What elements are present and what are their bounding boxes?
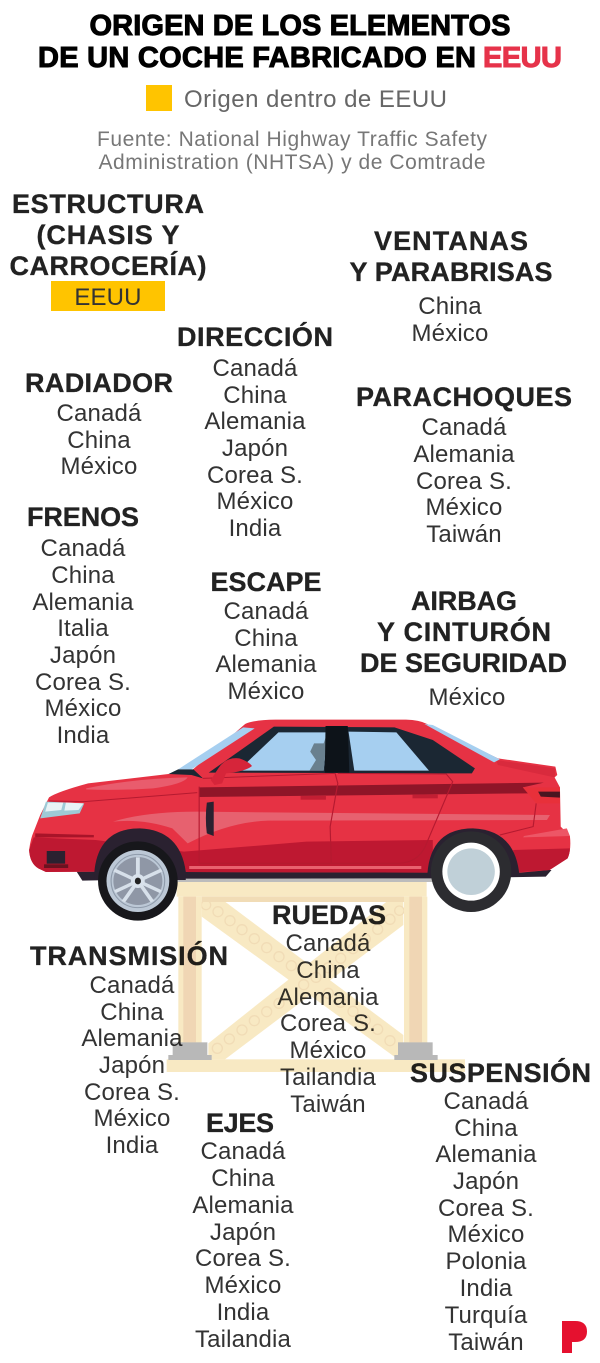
panel: frenos: Corea S.: [35, 669, 131, 696]
title: ORIGEN DE LOS ELEMENTOS: [90, 10, 510, 42]
panel: ruedas: Taiwán: [290, 1091, 366, 1118]
rear arch: [427, 828, 519, 875]
sill: [189, 866, 421, 869]
panel: airbag y cinturón de seguridad: DE SEGURIDAD: [360, 648, 567, 678]
car body: [29, 720, 570, 873]
panel: ejes: China: [211, 1165, 275, 1192]
panel: transmisión: Corea S.: [84, 1079, 180, 1106]
panel: ejes: Corea S.: [195, 1245, 291, 1272]
panel: escape: Alemania: [215, 651, 317, 678]
panel: parachoques: Taiwán: [426, 521, 502, 548]
panel: suspensión: SUSPENSIÓN: [410, 1057, 591, 1088]
panel: ventanas y parabrisas: México: [412, 320, 488, 347]
title: DE UN COCHE FABRICADO EN: [38, 42, 476, 74]
panel: ruedas: Corea S.: [280, 1010, 376, 1037]
panel: frenos: Alemania: [32, 589, 134, 616]
panel: estructura: ESTRUCTURA: [12, 189, 204, 219]
icon: publisher logo: [562, 1321, 587, 1353]
panel: radiador: México: [61, 453, 137, 480]
panel: frenos: Canadá: [41, 535, 126, 562]
panel: ejes: Tailandia: [195, 1326, 292, 1353]
lower body shade: [29, 837, 433, 873]
icon: car stand: [167, 882, 465, 1072]
panel: dirección: Corea S.: [207, 462, 303, 489]
panel: airbag y cinturón de seguridad: AIRBAG: [411, 586, 517, 616]
panel: estructura: (CHASIS Y: [36, 220, 180, 250]
panel: ruedas: [272, 900, 386, 1118]
source note: Administration (NHTSA) y de Comtrade: [98, 151, 486, 174]
front vent: [47, 851, 65, 864]
panel: suspensión: Polonia: [445, 1248, 527, 1275]
legend: Origen dentro de EEUU: [184, 86, 447, 113]
panel: radiador: China: [67, 427, 131, 454]
panel: ventanas y parabrisas: VENTANAS: [374, 226, 528, 256]
panel: estructura: EEUU: [74, 284, 142, 311]
panel: airbag y cinturón de seguridad: Y CINTURÓN: [377, 616, 551, 647]
panel: dirección: DIRECCIÓN: [177, 321, 333, 352]
panel: radiador: Canadá: [57, 400, 142, 427]
panel: transmisión: TRANSMISIÓN: [30, 940, 228, 971]
panel: ruedas: China: [296, 957, 360, 984]
panel: transmisión: [30, 940, 228, 1159]
panel: parachoques: PARACHOQUES: [356, 382, 572, 412]
panel: ejes: Japón: [210, 1219, 276, 1246]
panel: escape: México: [228, 678, 304, 705]
panel: frenos: [27, 502, 139, 749]
panel: ejes: Canadá: [201, 1138, 286, 1165]
panel: dirección: México: [217, 488, 293, 515]
panel: transmisión: Japón: [99, 1052, 165, 1079]
panel: suspensión: Canadá: [444, 1088, 529, 1115]
panel: ruedas: Tailandia: [280, 1064, 377, 1091]
panel: suspensión: Alemania: [435, 1141, 537, 1168]
side mirror: [211, 758, 252, 785]
source note: Fuente: National Highway Traffic Safety: [97, 128, 488, 151]
panel: suspensión: Corea S.: [438, 1195, 534, 1222]
panel: transmisión: México: [94, 1105, 170, 1132]
panel: transmisión: China: [100, 999, 164, 1026]
panel: ventanas y parabrisas: China: [418, 293, 482, 320]
panel: ruedas: México: [290, 1037, 366, 1064]
headlight: [40, 802, 84, 818]
rear wheel: [431, 831, 511, 912]
panel: escape: Canadá: [224, 598, 309, 625]
panel: ejes: Alemania: [192, 1192, 294, 1219]
panel: dirección: [177, 321, 333, 542]
panel: suspensión: [410, 1057, 591, 1356]
panel: ejes: [192, 1108, 294, 1353]
panel: suspensión: Japón: [453, 1168, 519, 1195]
panel: ruedas: Canadá: [286, 930, 371, 957]
panel: parachoques: Canadá: [422, 414, 507, 441]
windshield: [178, 727, 255, 769]
panel: ruedas: Alemania: [277, 984, 379, 1011]
panel: parachoques: Alemania: [413, 441, 515, 468]
panel: airbag y cinturón de seguridad: México: [429, 684, 505, 711]
source note: [97, 128, 488, 174]
panel: parachoques: Corea S.: [416, 468, 512, 495]
panel: frenos: Italia: [57, 615, 109, 642]
panel: estructura: [10, 189, 206, 311]
door outlines: [49, 773, 536, 863]
title: EEUU: [483, 42, 562, 74]
panel: estructura: CARROCERÍA): [10, 250, 206, 281]
panel: frenos: India: [57, 722, 110, 749]
panel: frenos: México: [45, 695, 121, 722]
panel: radiador: [25, 368, 173, 480]
panel: radiador: RADIADOR: [25, 368, 173, 398]
panel: frenos: FRENOS: [27, 502, 139, 532]
panel: dirección: China: [223, 382, 287, 409]
rear window: [424, 724, 500, 762]
panel: escape: ESCAPE: [210, 567, 322, 597]
tail light: [523, 787, 560, 803]
panel: transmisión: Canadá: [90, 972, 175, 999]
panel: airbag y cinturón de seguridad: [360, 586, 567, 711]
panel: ejes: India: [217, 1299, 270, 1326]
panel: suspensión: China: [454, 1115, 518, 1142]
panel: ruedas: RUEDAS: [272, 900, 386, 930]
panel: ventanas y parabrisas: Y PARABRISAS: [350, 257, 552, 287]
front arch: [94, 828, 186, 880]
panel: suspensión: India: [460, 1275, 513, 1302]
panel: suspensión: Taiwán: [448, 1329, 524, 1356]
icon: red car: [29, 720, 570, 921]
panel: dirección: Alemania: [204, 408, 306, 435]
panel: parachoques: [356, 382, 572, 548]
panel: transmisión: India: [106, 1132, 159, 1159]
panel: ejes: México: [205, 1272, 281, 1299]
panel: escape: [210, 567, 322, 705]
panel: ejes: EJES: [206, 1108, 274, 1138]
panel: transmisión: Alemania: [81, 1025, 183, 1052]
panel: suspensión: Turquía: [445, 1302, 528, 1329]
panel: parachoques: México: [426, 494, 502, 521]
window frame: [209, 727, 475, 773]
front wheel: [98, 841, 178, 921]
door handles: [301, 796, 326, 800]
panel: frenos: Japón: [50, 642, 116, 669]
panel: frenos: China: [51, 562, 115, 589]
panel: dirección: India: [229, 515, 282, 542]
title: [38, 10, 562, 74]
panel: ventanas y parabrisas: [350, 226, 552, 347]
panel: dirección: Japón: [222, 435, 288, 462]
panel: escape: China: [234, 625, 298, 652]
panel: dirección: Canadá: [213, 355, 298, 382]
panel: suspensión: México: [448, 1221, 524, 1248]
